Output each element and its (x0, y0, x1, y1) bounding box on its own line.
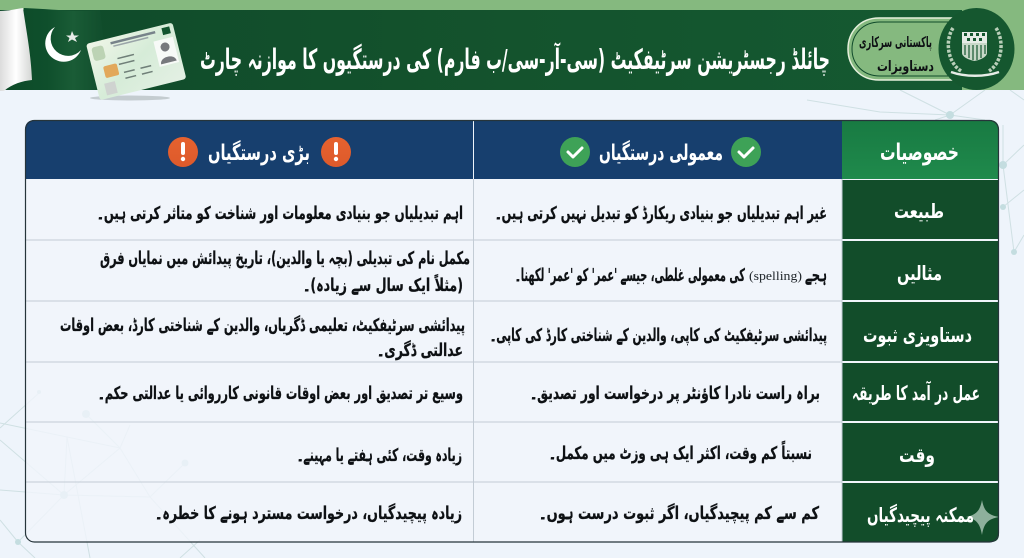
icon: check (731, 137, 761, 167)
header banner (0, 0, 1024, 90)
column header: features: خصوصیات (880, 140, 959, 166)
row labels: دستاویزی ثبوت (863, 323, 972, 347)
icon: crescent (45, 27, 81, 62)
grid lines (25, 179, 842, 542)
row labels: ممکنہ پیچیدگیاں (867, 503, 974, 528)
example cell: spelling mistake: کی معمولی غلطی، جیسے 'عمر' کو 'عمر' لکھنا۔ (515, 266, 745, 286)
minor corrections column (490, 204, 827, 524)
example cell: spelling mistake: ہجے (805, 266, 827, 286)
major corrections column: زیادہ پیچیدگیاں، درخواست مسترد ہونے کا خطرہ۔ (155, 503, 462, 524)
icon: warning (168, 137, 198, 167)
badge: Pakistani government documents (848, 18, 970, 80)
comparison table (25, 120, 999, 542)
column header: major corrections: بڑی درستگیاں (208, 139, 310, 166)
major corrections column: اہم تبدیلیاں جو بنیادی معلومات اور شناخت کو متاثر کرتی ہیں۔ (97, 204, 463, 224)
table outline (26, 120, 998, 542)
minor corrections column: نسبتاً کم وقت، اکثر ایک ہی وزٹ میں مکمل۔ (549, 440, 812, 464)
table body background (25, 179, 999, 542)
minor corrections column: غیر اہم تبدیلیاں جو بنیادی ریکارڈ کو تبدیل نہیں کرتی ہیں۔ (495, 204, 827, 224)
major corrections column: عدالتی ڈگری۔ (377, 340, 463, 361)
icon: warning (321, 137, 351, 167)
column header: major corrections (25, 120, 473, 179)
major corrections column: وسیع تر تصدیق اور بعض اوقات قانونی کارروائی یا عدالتی حکم۔ (98, 384, 463, 404)
example cell: spelling mistake: (spelling) (749, 268, 802, 283)
icon: identity card (86, 22, 186, 101)
column header: minor corrections (474, 120, 842, 179)
icon: star (66, 31, 79, 42)
row labels (842, 180, 999, 542)
major corrections column (60, 204, 470, 524)
minor corrections column: کم سے کم پیچیدگیاں، اگر ثبوت درست ہوں۔ (539, 503, 820, 524)
badge: Pakistani government documents: پاکستانی سرکاری (859, 35, 932, 51)
column header: features (842, 120, 999, 179)
column header: minor corrections: معمولی درستگیاں (599, 139, 723, 166)
icon: check (560, 137, 590, 167)
minor corrections column: براہ راست نادرا کاؤنٹر پر درخواست اور تصدیق۔ (530, 384, 820, 404)
flag of Pakistan (0, 8, 110, 91)
major corrections column: مکمل نام کی تبدیلی (بچہ یا والدین)، تاریخ پیدائش میں نمایاں فرق (100, 249, 470, 269)
major corrections column: پیدائشی سرٹیفکیٹ، تعلیمی ڈگریاں، والدین کے شناختی کارڈ، بعض اوقات (60, 315, 465, 336)
badge: Pakistani government documents: دستاویزات (877, 59, 934, 75)
row labels: مثالیں (897, 261, 942, 285)
row labels: وقت (899, 443, 935, 467)
row labels: طبیعت (894, 199, 944, 223)
icon: sparkle (966, 500, 999, 535)
major corrections column: (مثلاً ایک سال سے زیادہ)۔ (303, 273, 463, 296)
icon: state emblem (938, 8, 1014, 90)
major corrections column: زیادہ وقت، کئی ہفتے یا مہینے۔ (297, 446, 462, 466)
